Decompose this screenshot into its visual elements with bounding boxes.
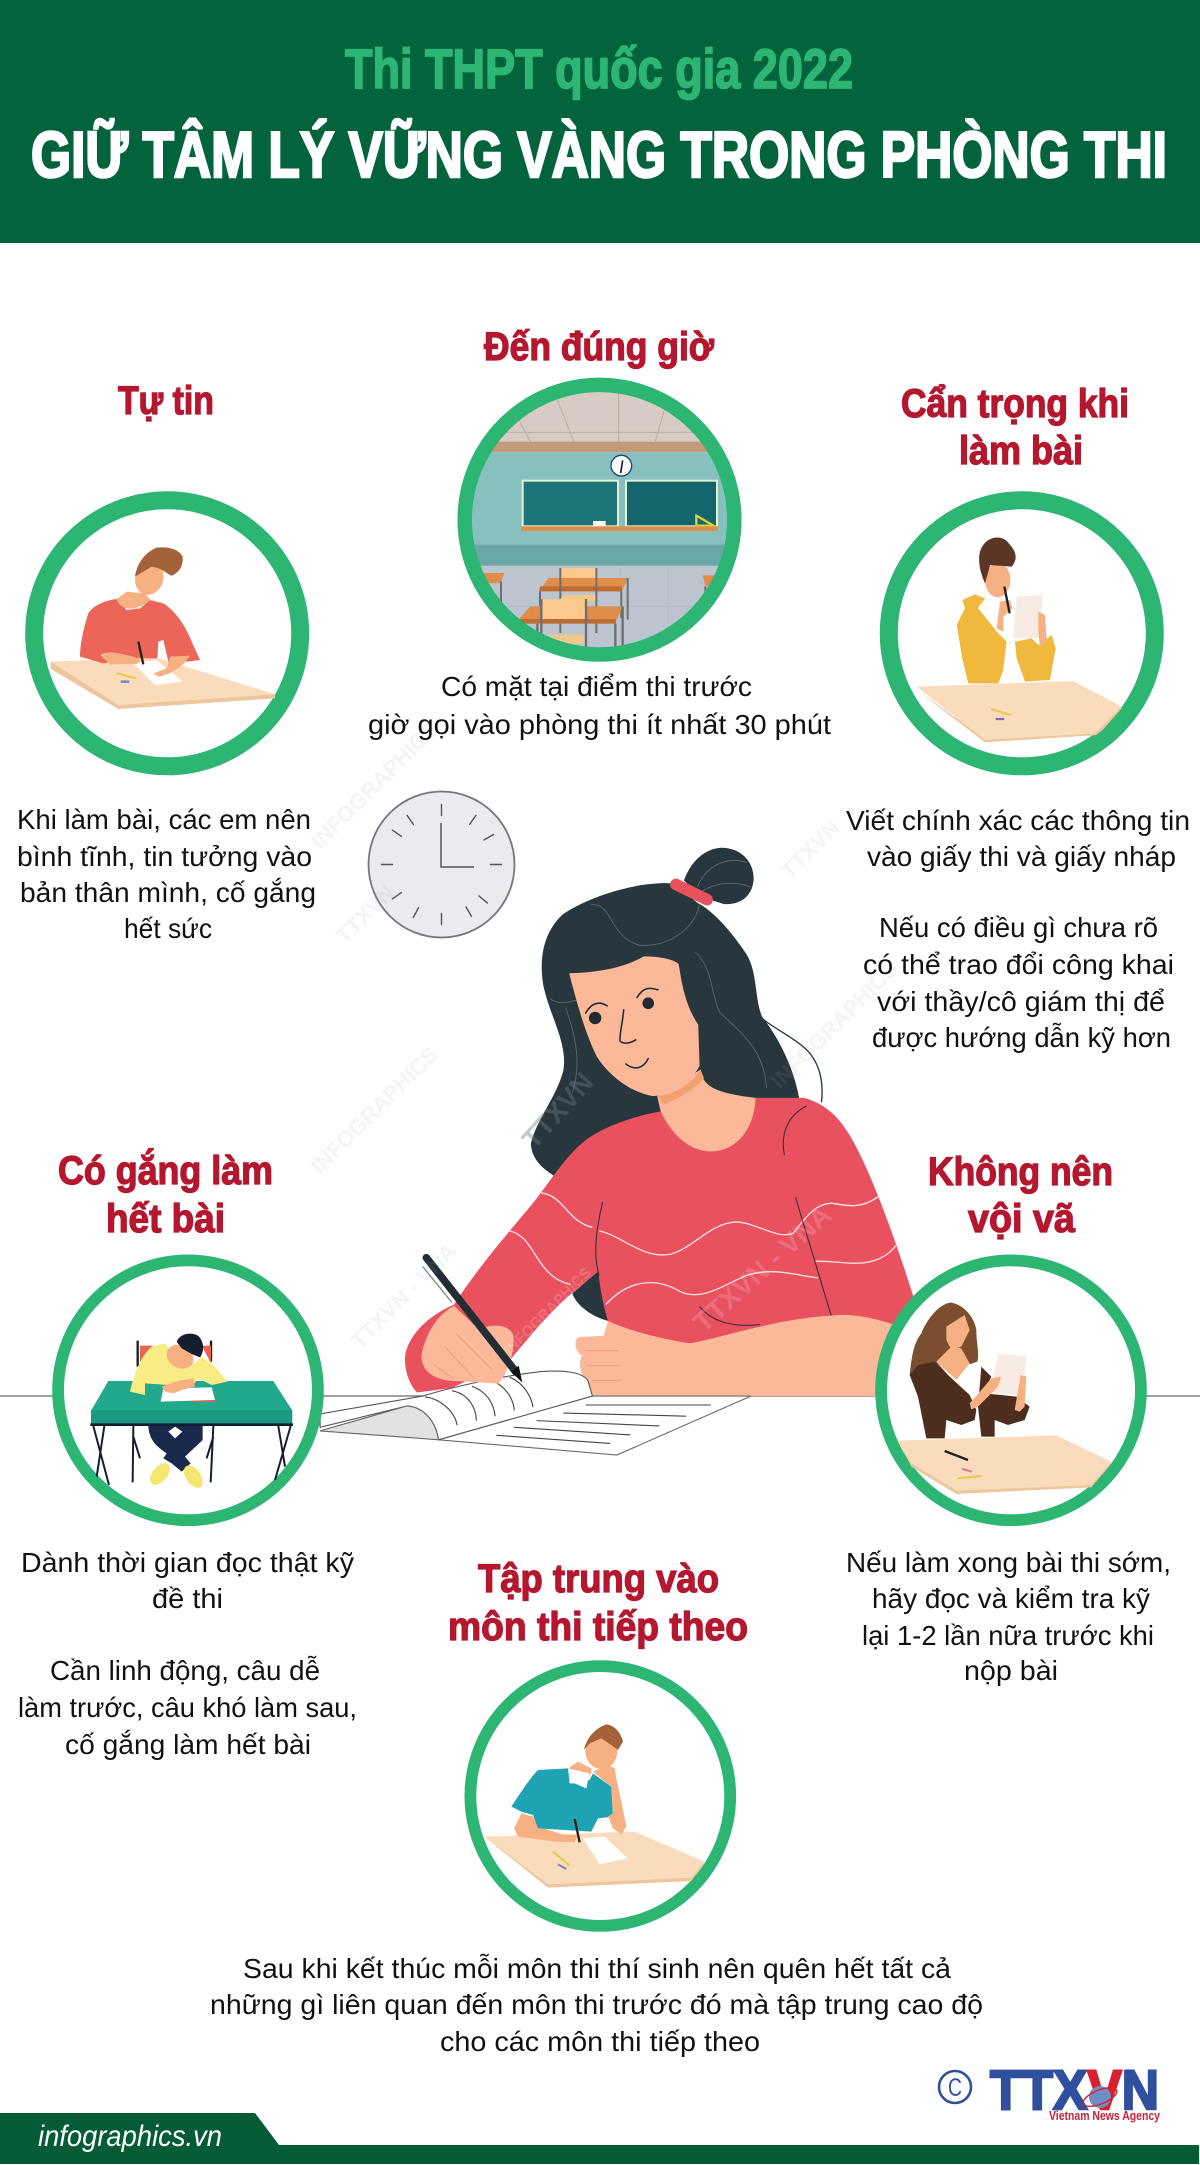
heading: Không nên vội vã: vội vã xyxy=(968,1197,1076,1241)
table line xyxy=(0,1395,1200,1397)
heading: Cẩn trọng khi làm bài: làm bài xyxy=(959,429,1083,473)
icon: copyright: C xyxy=(948,2074,962,2102)
body text: những gì liên quan đến môn thi trước đó mà tập trung cao độ xyxy=(210,1989,983,2020)
wall clock xyxy=(368,792,514,938)
header banner xyxy=(0,0,1200,243)
body text: được hướng dẫn kỹ hơn xyxy=(872,1022,1171,1053)
heading: Có gắng làm hết bài: hết bài xyxy=(106,1197,225,1241)
body text: với thầy/cô giám thị để xyxy=(877,986,1165,1017)
body text: bình tĩnh, tin tưởng vào xyxy=(17,841,312,872)
hair strand xyxy=(749,1005,822,1102)
sweater folds xyxy=(596,1106,831,1325)
pen xyxy=(423,1267,452,1302)
watermarks xyxy=(306,717,903,1354)
circle illustration: student at green desk xyxy=(58,1260,318,1520)
logo: TTXVN copyright xyxy=(939,2058,1161,2123)
main illustration: girl writing at desk: INFOGRAPHICS xyxy=(501,1265,595,1359)
watermarks: TTXVN xyxy=(331,880,400,949)
body text xyxy=(846,805,1190,1053)
body text: lại 1-2 lần nữa trước khi xyxy=(862,1620,1154,1651)
body text: hãy đọc và kiểm tra kỹ xyxy=(872,1583,1150,1614)
body text xyxy=(210,1953,983,2057)
body text: đề thi xyxy=(152,1583,223,1614)
body text: làm trước, câu khó làm sau, xyxy=(18,1692,357,1723)
main illustration: girl writing at desk: TTXVN - VNA xyxy=(687,1199,837,1338)
body text: Viết chính xác các thông tin xyxy=(846,805,1190,836)
notebook xyxy=(320,1371,751,1455)
panel: Cẩn trọng khi làm bài xyxy=(846,382,1190,1053)
circle illustration: woman reading paper xyxy=(881,1260,1141,1520)
panel: Không nên vội vã xyxy=(846,1150,1171,1686)
body text xyxy=(368,671,831,740)
body text: vào giấy thi và giấy nháp xyxy=(867,841,1176,872)
panel: Đến đúng giờ xyxy=(368,325,831,740)
watermarks: TTXVN xyxy=(776,815,845,884)
body text: nộp bài xyxy=(964,1655,1058,1686)
panel: Có gắng làm hết bài xyxy=(18,1147,357,1760)
footer url: infographics.vn xyxy=(38,2120,222,2153)
circle illustration: confident student xyxy=(34,500,300,766)
neck xyxy=(657,1070,755,1151)
heading: Đến đúng giờ: Đến đúng giờ xyxy=(484,325,714,369)
heading: Không nên vội vã: Không nên xyxy=(928,1150,1113,1194)
panel: Tập trung vào môn thi tiếp theo xyxy=(210,1557,983,2057)
wordmark: TTXVN xyxy=(990,2058,1159,2121)
heading: Tập trung vào môn thi tiếp theo: Tập trung vào xyxy=(478,1557,719,1601)
body text: Nếu làm xong bài thi sớm, xyxy=(846,1547,1171,1578)
body text xyxy=(846,1547,1171,1686)
desks xyxy=(482,573,504,584)
lower hair xyxy=(572,1271,609,1321)
main illustration: girl writing at desk xyxy=(320,848,947,1455)
watermark on girl: TTXVN xyxy=(516,1066,599,1155)
heading: Tập trung vào môn thi tiếp theo: môn thi tiếp theo xyxy=(448,1605,748,1649)
body text: hết sức xyxy=(124,913,212,944)
heading: Không nên vội vã xyxy=(928,1150,1113,1241)
heading: Cẩn trọng khi làm bài: Cẩn trọng khi xyxy=(901,382,1129,426)
body text: Có mặt tại điểm thi trước xyxy=(441,671,752,702)
watermarks: INFOGRAPHICS xyxy=(306,717,443,854)
body text: cố gắng làm hết bài xyxy=(65,1729,311,1760)
sweater xyxy=(405,1098,925,1393)
heading: Có gắng làm hết bài: Có gắng làm xyxy=(58,1147,273,1193)
body text: cho các môn thi tiếp theo xyxy=(440,2026,760,2057)
body text: bản thân mình, cố gắng xyxy=(20,877,316,908)
body text: Nếu có điều gì chưa rõ xyxy=(879,912,1158,943)
header subtitle: Thi THPT quốc gia 2022 xyxy=(345,37,853,100)
watermarks: TTXVN - VNA xyxy=(346,1238,461,1354)
body text: giờ gọi vào phòng thi ít nhất 30 phút xyxy=(368,709,831,740)
watermarks: INFOGRAPHICS xyxy=(766,957,903,1094)
body text: có thể trao đổi công khai xyxy=(863,949,1174,980)
hair bun xyxy=(684,848,754,904)
body text: Sau khi kết thúc mỗi môn thi thí sinh nên quên hết tất cả xyxy=(243,1953,952,1984)
circle illustration: careful student xyxy=(889,500,1155,766)
body text: Cần linh động, câu dễ xyxy=(50,1655,320,1686)
left hand xyxy=(421,1306,514,1384)
right forearm xyxy=(575,1315,947,1396)
face xyxy=(569,956,700,1096)
heading: Có gắng làm hết bài xyxy=(58,1147,273,1241)
hair xyxy=(531,883,800,1182)
icon: copyright xyxy=(939,2071,971,2103)
heading: Tự tin: Tự tin xyxy=(118,379,214,423)
heading: Tập trung vào môn thi tiếp theo xyxy=(448,1557,748,1649)
panel: Tự tin xyxy=(17,379,316,944)
body text: Dành thời gian đọc thật kỹ xyxy=(21,1547,354,1578)
body text xyxy=(17,804,316,944)
footer bar xyxy=(0,2113,1199,2164)
body text xyxy=(18,1547,357,1760)
watermarks: INFOGRAPHICS xyxy=(306,1042,443,1179)
circle illustration: classroom xyxy=(464,385,735,656)
sweater waves xyxy=(510,1193,897,1305)
wordmark: Vietnam News Agency xyxy=(1049,2108,1161,2123)
body text: Khi làm bài, các em nên xyxy=(17,804,311,835)
circle illustration: student in teal shirt xyxy=(470,1666,730,1926)
heading: Cẩn trọng khi làm bài xyxy=(901,382,1129,473)
